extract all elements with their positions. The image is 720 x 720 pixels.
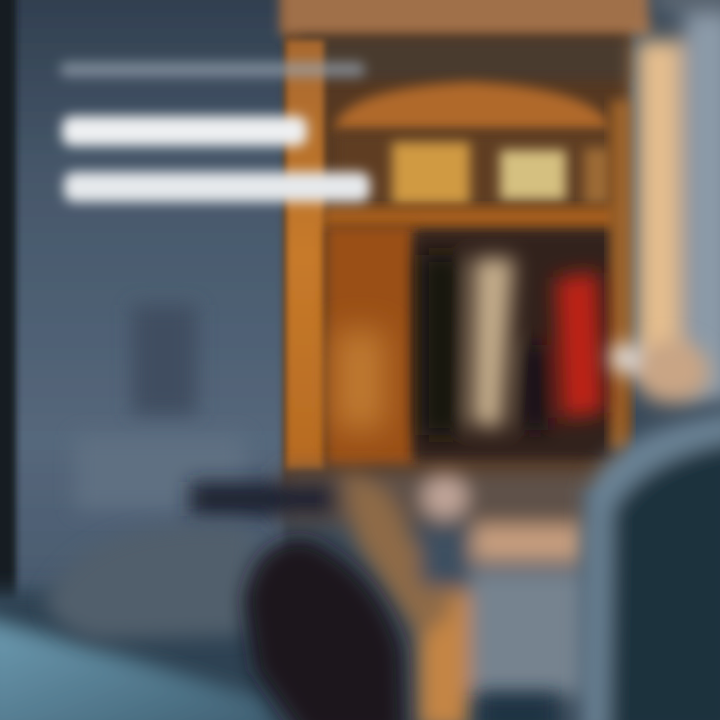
hanging clothes xyxy=(422,255,604,435)
wall panel xyxy=(0,0,284,640)
heading line 1 xyxy=(62,116,307,146)
lamp and small objects xyxy=(610,340,710,404)
dark left strip xyxy=(0,0,16,600)
heading line 2 xyxy=(64,172,370,202)
small line xyxy=(60,62,365,77)
bed and floor xyxy=(0,470,590,720)
wardrobe xyxy=(280,0,650,490)
pillow xyxy=(45,524,255,640)
right side wall xyxy=(636,0,720,400)
armchair xyxy=(478,412,720,720)
dark foreground shape xyxy=(245,540,405,720)
heading placeholder lines xyxy=(60,62,370,202)
